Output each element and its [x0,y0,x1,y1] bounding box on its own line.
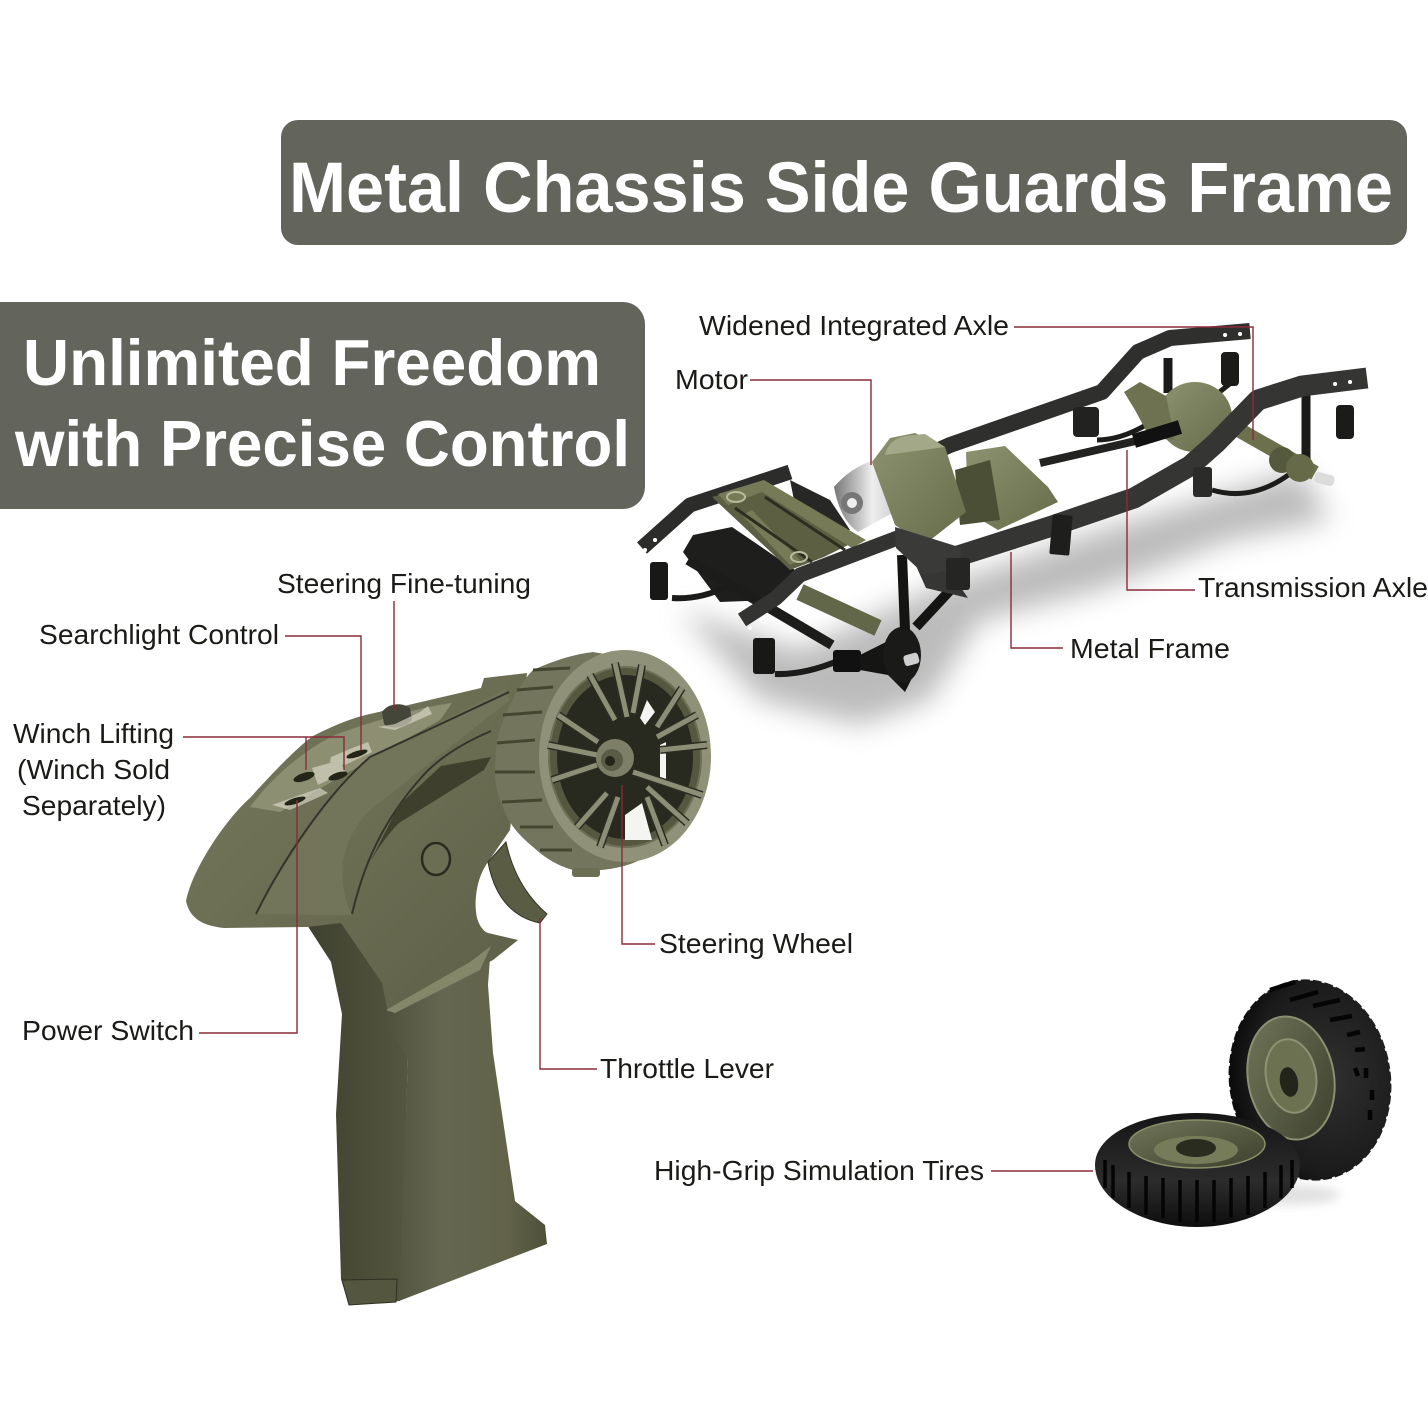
far rail bracket [1073,407,1099,437]
finger guard highlight [386,946,491,1013]
button: searchlight [346,748,368,760]
label: Throttle Lever: Throttle Lever [600,1053,774,1084]
gearbox housing rear [966,446,1058,530]
tire shadow [1240,1185,1340,1205]
chassis shadow [680,470,1330,725]
battery cap [342,1279,397,1305]
upright tire [1216,969,1404,1191]
front dark mechanism [683,527,795,602]
leader: Power Switch [199,800,297,1033]
label: High-Grip Simulation Tires: High-Grip Simulation Tires [654,1155,984,1186]
driveshaft [1040,440,1140,463]
label: Power Switch: Power Switch [22,1015,194,1046]
frame brackets [1049,514,1073,556]
front springs and shackles [672,586,840,674]
side recess [370,757,491,862]
button: winch left [292,770,316,784]
trigger [488,842,547,923]
leader: Steering Wheel [622,785,655,944]
button: winch right [327,770,349,782]
title banner: Metal Chassis Side Guards Frame: Metal Chassis Side Guards Frame [289,149,1393,228]
side button [422,843,450,875]
label: Winch Lifting (Winch Sold Separately): (Winch Sold [17,754,170,785]
label: Winch Lifting (Winch Sold Separately) [13,718,174,821]
heading banner: Unlimited Freedom with Precise Control: Unlimited Freedom [23,326,601,399]
leader: Winch Lifting [183,737,344,770]
near frame rail [958,378,1367,556]
spokes shadows [548,663,707,847]
tyre grooves [495,668,572,850]
top control panel [250,703,452,812]
front shoulder shading [256,690,510,915]
under wheel tab [572,868,600,877]
tyre band [495,652,640,871]
gearbox centre [955,460,1000,525]
wheel hub [596,739,634,777]
label: Widened Integrated Axle: Widened Integrated Axle [699,310,1009,341]
lying tire lugs [1105,1160,1292,1222]
leader: Throttle Lever [540,918,597,1069]
leader: Metal Frame [1011,552,1063,648]
label: Metal Frame: Metal Frame [1070,633,1230,664]
frame cross member [895,527,962,575]
leader: Searchlight Control [285,636,361,750]
body seam lines [256,692,509,914]
spokes [548,663,707,847]
front suspension plate [712,483,858,570]
rear axle tube [1232,426,1315,473]
heading banner: Unlimited Freedom with Precise Control [0,302,645,509]
upright tire lugs [1270,982,1372,1120]
grip front panel [384,944,547,1301]
front axle [688,560,832,645]
remote controller illustration [186,650,711,1305]
leader: Steering Fine-tuning [393,601,395,710]
label: Steering Fine-tuning: Steering Fine-tuning [277,568,531,599]
chassis illustration [642,331,1367,725]
lying tire [1095,1113,1300,1227]
title banner: Metal Chassis Side Guards Frame [281,120,1407,245]
label: Transmission Axle: Transmission Axle [1198,572,1428,603]
wheel windows [625,700,666,840]
upright tire hub [1238,1009,1344,1147]
rear springs [1097,382,1309,494]
front dark block [790,480,850,530]
wheel interior [549,667,701,847]
motor [834,460,898,532]
far frame rail [850,331,1250,490]
label: Motor: Motor [675,364,748,395]
top panel icons [272,706,432,810]
lower frame web [908,548,968,598]
universal joint [1134,427,1180,441]
plate holes [727,492,745,502]
lying tire hub [1129,1120,1265,1168]
label: Searchlight Control: Searchlight Control [39,619,279,650]
tires illustration [1095,969,1404,1227]
leader: Transmission Axle [1127,450,1195,590]
front struts [902,555,955,630]
label: Winch Lifting (Winch Sold Separately): Winch Lifting [13,718,174,749]
rear axle housing [1158,382,1232,452]
grip side panel [307,915,408,1305]
button: power switch [284,795,306,807]
gearbox housing front [872,433,966,545]
label: Winch Lifting (Winch Sold Separately): Separately) [22,790,166,821]
steering wheel [495,650,711,877]
front cross plate [642,472,790,548]
leader: Motor [750,380,871,465]
rim [539,650,711,862]
upper body shell [186,673,527,1012]
front wheel hub [860,640,915,692]
leader: Widened Integrated Axle [1014,327,1253,440]
button: steering fine-tuning knob [382,704,412,727]
rail end holes [645,334,1350,628]
label: Steering Wheel: Steering Wheel [659,928,853,959]
heading banner: Unlimited Freedom with Precise Control: with Precise Control [14,407,630,480]
leader: High-Grip Simulation Tires [991,1170,1093,1172]
